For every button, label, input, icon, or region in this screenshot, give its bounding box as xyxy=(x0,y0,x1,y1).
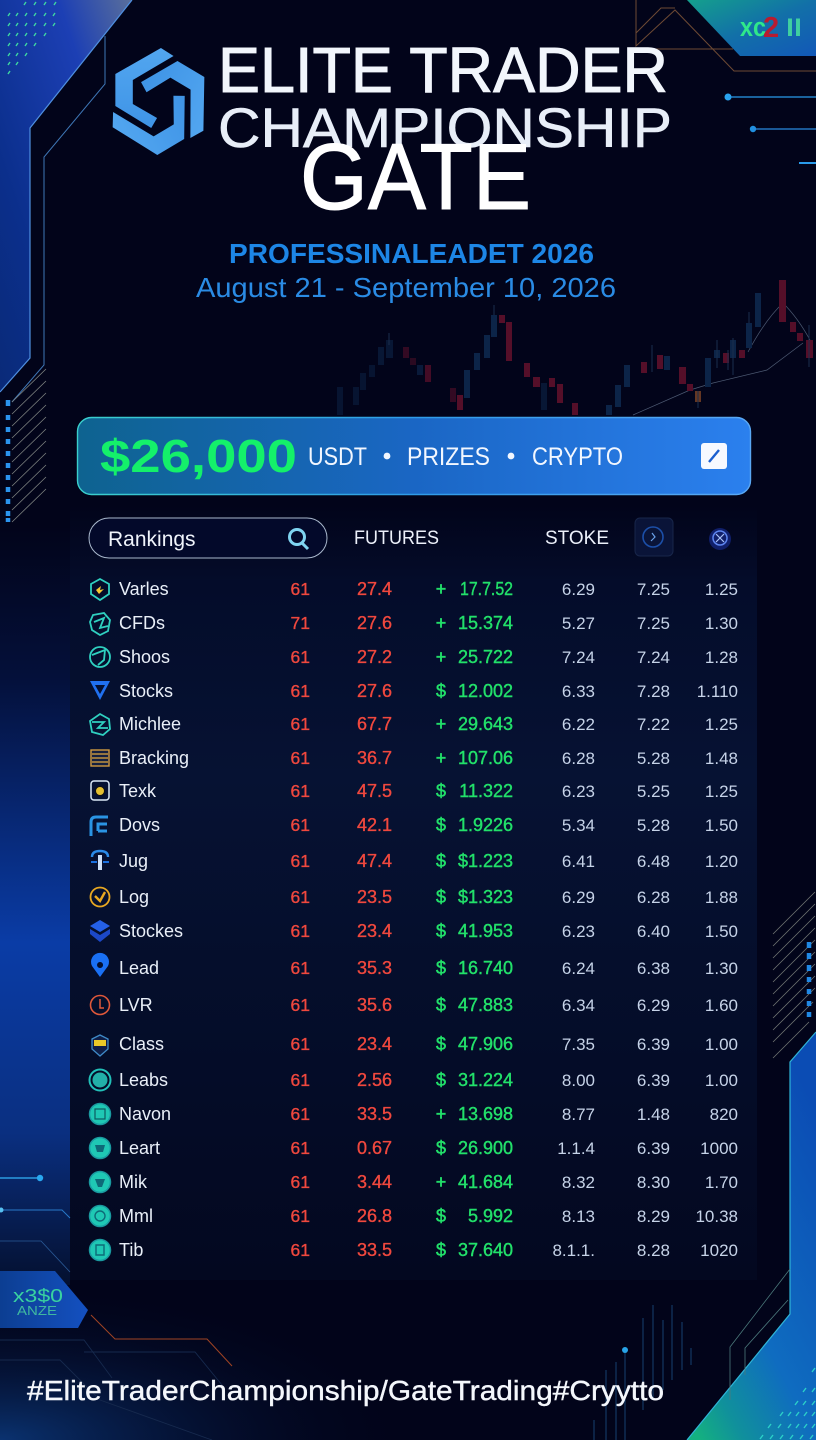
row: Leabs: Leabs xyxy=(119,1070,168,1090)
row: Class: Class xyxy=(119,1034,164,1054)
row: Jug: 6.41 xyxy=(562,852,595,871)
row: Class: 23.4 xyxy=(357,1034,392,1054)
row: Log: 23.5 xyxy=(357,887,392,907)
row: Shoos: 7.24 xyxy=(637,648,670,667)
row: Log xyxy=(90,887,738,907)
icon: clock header xyxy=(635,518,673,556)
row: Shoos: 25.722 xyxy=(458,647,513,667)
title: GATE: GATE xyxy=(300,124,531,229)
row: Class: 61 xyxy=(291,1034,310,1054)
row: Stockes: 6.40 xyxy=(637,922,670,941)
row: Log: 6.29 xyxy=(562,888,595,907)
row: Stockes: $ xyxy=(436,921,446,941)
row: Mik: 41.684 xyxy=(458,1172,513,1192)
row: Stockes: Stockes xyxy=(119,921,183,941)
bottom-left glow xyxy=(0,1280,420,1440)
row: Shoos: 61 xyxy=(291,647,310,667)
row: Leabs: 2.56 xyxy=(357,1070,392,1090)
bottom-left corner badge xyxy=(0,1271,88,1328)
top-left dot pattern xyxy=(8,2,56,74)
row: Shoos: 1.28 xyxy=(705,648,738,667)
row: Lead xyxy=(91,953,738,978)
top-right teal corner panel xyxy=(687,0,816,56)
row: Leart: 1.1.4 xyxy=(557,1139,595,1158)
row: Varles: 17.7.52 xyxy=(460,579,513,599)
row: CFDs: 71 xyxy=(291,613,310,633)
row: Navon: + xyxy=(436,1104,446,1124)
row: Lead: 16.740 xyxy=(458,958,513,978)
top-right connector 2 xyxy=(750,126,816,132)
row: Bracking: + xyxy=(436,748,446,768)
row: Jug: 1.20 xyxy=(705,852,738,871)
bottom-left circuit lines xyxy=(0,1340,222,1440)
row: Log: $1.323 xyxy=(458,887,513,907)
row: CFDs: 27.6 xyxy=(357,613,392,633)
row: Jug: 6.48 xyxy=(637,852,670,871)
icon: edit button xyxy=(701,443,727,469)
row: Navon: 1.48 xyxy=(637,1105,670,1124)
row: Lead: 1.30 xyxy=(705,959,738,978)
row: Dovs xyxy=(91,815,738,836)
top-right corner logo text xyxy=(740,12,802,44)
row: Bracking: 61 xyxy=(291,748,310,768)
row: Michlee: 7.22 xyxy=(637,715,670,734)
banner labels xyxy=(308,443,623,471)
row: Log: 6.28 xyxy=(637,888,670,907)
row: Class: 1.00 xyxy=(705,1035,738,1054)
prize amount: $26,000 xyxy=(100,430,297,482)
prize banner xyxy=(78,418,750,494)
row: CFDs: 1.30 xyxy=(705,614,738,633)
row: Michlee: 67.7 xyxy=(357,714,392,734)
row: Mml: $ xyxy=(436,1206,446,1226)
row: Texk: 61 xyxy=(291,781,310,801)
row: Varles: 61 xyxy=(291,579,310,599)
table rows xyxy=(90,579,738,1260)
row: Log: 1.88 xyxy=(705,888,738,907)
row: Tib: 33.5 xyxy=(357,1240,392,1260)
row: Jug: 61 xyxy=(291,851,310,871)
row: Mml: 61 xyxy=(291,1206,310,1226)
icon: coin header xyxy=(709,528,731,550)
row: Jug xyxy=(91,851,738,871)
row: LVR: 35.6 xyxy=(357,995,392,1015)
row: Mik: 8.30 xyxy=(637,1173,670,1192)
row: Lead: Lead xyxy=(119,958,159,978)
row: Michlee xyxy=(90,714,738,735)
row: Mik xyxy=(90,1172,738,1192)
row: Jug: 47.4 xyxy=(357,851,392,871)
row: Michlee: Michlee xyxy=(119,714,181,734)
row: Navon xyxy=(90,1104,738,1124)
left connector 1 xyxy=(0,1175,43,1181)
lower-right circuit lines xyxy=(730,1269,790,1400)
row: Varles: Varles xyxy=(119,579,169,599)
top-left panel edge xyxy=(0,0,132,392)
row: Dovs: $ xyxy=(436,815,446,835)
column header: stoke: STOKE xyxy=(545,527,609,549)
right dots xyxy=(807,942,811,1017)
row: LVR: 6.34 xyxy=(562,996,595,1015)
row: Leabs: 8.00 xyxy=(562,1071,595,1090)
left side blue glow xyxy=(0,525,70,1285)
row: Shoos: 7.24 xyxy=(562,648,595,667)
row: LVR: 1.60 xyxy=(705,996,738,1015)
row: Leart: 26.900 xyxy=(458,1138,513,1158)
row: Dovs: 5.34 xyxy=(562,816,595,835)
lower-right panel edge xyxy=(687,1032,816,1440)
row: CFDs: 5.27 xyxy=(562,614,595,633)
row: Stockes: 61 xyxy=(291,921,310,941)
row: Tib: 8.28 xyxy=(637,1241,670,1260)
row: Leart: 61 xyxy=(291,1138,310,1158)
row: Leabs: 61 xyxy=(291,1070,310,1090)
row: Leart: 1000 xyxy=(700,1139,738,1158)
row: Lead: 61 xyxy=(291,958,310,978)
row: Stocks: 12.002 xyxy=(458,681,513,701)
row: Navon: 33.5 xyxy=(357,1104,392,1124)
row: Texk: 5.25 xyxy=(637,782,670,801)
row: Stocks: 1.110 xyxy=(697,682,738,701)
row: Dovs: Dovs xyxy=(119,815,160,835)
row: Bracking: 107.06 xyxy=(458,748,513,768)
row: LVR: $ xyxy=(436,995,446,1015)
row: Stocks: 7.28 xyxy=(637,682,670,701)
row: CFDs xyxy=(90,613,738,635)
row: Class: $ xyxy=(436,1034,446,1054)
row: Mml: Mml xyxy=(119,1206,153,1226)
row: Mik: 1.70 xyxy=(705,1173,738,1192)
banner labels: PRIZES xyxy=(407,443,490,471)
row: Leabs: $ xyxy=(436,1070,446,1090)
row: Mml: 10.38 xyxy=(695,1207,738,1226)
banner labels: USDT xyxy=(308,443,367,471)
title: CHAMPIONSHIP: CHAMPIONSHIP xyxy=(218,96,672,159)
row: Navon: 13.698 xyxy=(458,1104,513,1124)
row: Stocks: Stocks xyxy=(119,681,173,701)
row: Leart xyxy=(90,1138,738,1158)
row: Lead: 6.24 xyxy=(562,959,595,978)
bottom-left corner badge: x3$0 xyxy=(13,1286,63,1306)
top-right corner logo text: ll xyxy=(786,15,802,42)
row: Michlee: 6.22 xyxy=(562,715,595,734)
row: Texk xyxy=(91,781,738,801)
row: CFDs: 7.25 xyxy=(637,614,670,633)
search pill: Rankings xyxy=(108,528,196,551)
row: Class xyxy=(92,1034,738,1056)
left connector 2 xyxy=(0,1208,70,1218)
row: Tib xyxy=(90,1240,738,1260)
row: Texk: 1.25 xyxy=(705,782,738,801)
title: ELITE TRADER: ELITE TRADER xyxy=(218,34,668,106)
hashtag footer: #EliteTraderChampionship/GateTrading#Cryytto xyxy=(27,1375,664,1406)
left dots xyxy=(6,400,10,522)
row: Bracking: 36.7 xyxy=(357,748,392,768)
bottom-left orange circuit xyxy=(91,1315,232,1366)
row: Bracking: 6.28 xyxy=(562,749,595,768)
row: Stocks: $ xyxy=(436,681,446,701)
row: Tib: $ xyxy=(436,1240,446,1260)
row: Leart: Leart xyxy=(119,1138,160,1158)
row: Michlee: 1.25 xyxy=(705,715,738,734)
row: Mik: 8.32 xyxy=(562,1173,595,1192)
row: CFDs: CFDs xyxy=(119,613,165,633)
row: Varles: 6.29 xyxy=(562,580,595,599)
row: LVR: 6.29 xyxy=(637,996,670,1015)
row: Stocks: 27.6 xyxy=(357,681,392,701)
row: Varles: + xyxy=(436,579,446,599)
row: Lead: 35.3 xyxy=(357,958,392,978)
column header: futures: FUTURES xyxy=(354,527,439,549)
row: Navon: 8.77 xyxy=(562,1105,595,1124)
row: Tib: Tib xyxy=(119,1240,143,1260)
row: Shoos: 27.2 xyxy=(357,647,392,667)
row: Lead: $ xyxy=(436,958,446,978)
date range: August 21 - September 10, 2026 xyxy=(196,272,616,303)
row: Varles: 7.25 xyxy=(637,580,670,599)
row: Jug: $ xyxy=(436,851,446,871)
row: Stockes: 41.953 xyxy=(458,921,513,941)
top-left blue corner panel xyxy=(0,0,132,392)
row: Class: 47.906 xyxy=(458,1034,513,1054)
row: Shoos: Shoos xyxy=(119,647,170,667)
row: Bracking: 5.28 xyxy=(637,749,670,768)
row: CFDs: 15.374 xyxy=(458,613,513,633)
row: Leabs: 6.39 xyxy=(637,1071,670,1090)
row: Stocks xyxy=(90,681,738,701)
row: Jug: $1.223 xyxy=(458,851,513,871)
row: Michlee: + xyxy=(436,714,446,734)
icon xyxy=(91,579,109,600)
row: Navon: 820 xyxy=(710,1105,738,1124)
row: Mml: 5.992 xyxy=(468,1206,513,1226)
row: Mik: + xyxy=(436,1172,446,1192)
top-right circuit lines xyxy=(636,0,816,71)
subtitle: PROFESSINALEADET 2026 xyxy=(229,238,594,269)
row: Dovs: 42.1 xyxy=(357,815,392,835)
row: Log: $ xyxy=(436,887,446,907)
row: Mik: Mik xyxy=(119,1172,148,1192)
row: LVR: LVR xyxy=(119,995,153,1015)
row: Tib: 8.1.1. xyxy=(552,1241,595,1260)
row: Jug: Jug xyxy=(119,851,148,871)
right hatch lines xyxy=(773,892,815,1058)
row: Class: 6.39 xyxy=(637,1035,670,1054)
row: Mik: 3.44 xyxy=(357,1172,392,1192)
row: LVR: 47.883 xyxy=(458,995,513,1015)
row: Lead: 6.38 xyxy=(637,959,670,978)
lower-right dot pattern xyxy=(760,1368,815,1439)
row: Class: 7.35 xyxy=(562,1035,595,1054)
row: Tib: 1020 xyxy=(700,1241,738,1260)
row: Log: 61 xyxy=(291,887,310,907)
row: Mml: 26.8 xyxy=(357,1206,392,1226)
row: Leabs: 31.224 xyxy=(458,1070,513,1090)
row: Navon: Navon xyxy=(119,1104,171,1124)
row: Leart: 0.67 xyxy=(357,1138,392,1158)
top-right connector 3 xyxy=(799,162,816,164)
search pill xyxy=(89,518,327,558)
row: Log: Log xyxy=(119,887,149,907)
row: Stockes xyxy=(90,920,738,942)
bottom circuit vertical lines xyxy=(594,1305,691,1440)
row: Stockes: 6.23 xyxy=(562,922,595,941)
row: Shoos: + xyxy=(436,647,446,667)
top-right corner logo text: 2 xyxy=(763,12,779,44)
table panel xyxy=(70,505,757,1280)
row: Leabs: 1.00 xyxy=(705,1071,738,1090)
row: Mik: 61 xyxy=(291,1172,310,1192)
row: Leart: 6.39 xyxy=(637,1139,670,1158)
row: Varles xyxy=(91,579,738,600)
row: Stockes: 23.4 xyxy=(357,921,392,941)
row: Stocks: 61 xyxy=(291,681,310,701)
row: Shoos xyxy=(90,647,738,667)
row: Texk: 6.23 xyxy=(562,782,595,801)
banner labels: CRYPTO xyxy=(532,443,623,471)
icon: search xyxy=(290,530,308,549)
row: Mml: 8.13 xyxy=(562,1207,595,1226)
row: Dovs: 1.50 xyxy=(705,816,738,835)
row: Bracking xyxy=(91,748,738,768)
top-right connector 1 xyxy=(724,94,816,100)
row: Texk: 11.322 xyxy=(459,781,513,801)
row: Mml xyxy=(90,1206,738,1226)
row: Texk: 47.5 xyxy=(357,781,392,801)
row: Michlee: 61 xyxy=(291,714,310,734)
row: Stocks: 6.33 xyxy=(562,682,595,701)
row: Stockes: 1.50 xyxy=(705,922,738,941)
row: Leart: $ xyxy=(436,1138,446,1158)
row: Dovs: 5.28 xyxy=(637,816,670,835)
logo: hexagon swirl xyxy=(106,48,226,168)
row: LVR xyxy=(90,995,738,1015)
row: Dovs: 1.9226 xyxy=(458,815,513,835)
row: Varles: 27.4 xyxy=(357,579,392,599)
left hatch lines xyxy=(12,369,46,522)
row: Tib: 37.640 xyxy=(458,1240,513,1260)
row: Texk: Texk xyxy=(119,781,157,801)
left circuit line xyxy=(12,36,105,402)
row: Dovs: 61 xyxy=(291,815,310,835)
row: Navon: 61 xyxy=(291,1104,310,1124)
candlestick chart xyxy=(337,280,813,415)
row: Texk: $ xyxy=(436,781,446,801)
row: Bracking: Bracking xyxy=(119,748,189,768)
left circuit polyline xyxy=(0,1241,70,1272)
row: Tib: 61 xyxy=(291,1240,310,1260)
row: Mml: 8.29 xyxy=(637,1207,670,1226)
row: LVR: 61 xyxy=(291,995,310,1015)
row: Michlee: 29.643 xyxy=(458,714,513,734)
lower-right blue corner panel xyxy=(687,1032,816,1440)
row: Bracking: 1.48 xyxy=(705,749,738,768)
row: Leabs xyxy=(90,1070,738,1090)
row: CFDs: + xyxy=(436,613,446,633)
row: Varles: 1.25 xyxy=(705,580,738,599)
bottom-left corner badge: ANZE xyxy=(17,1303,57,1318)
top-right corner logo text: xc xyxy=(740,12,766,42)
